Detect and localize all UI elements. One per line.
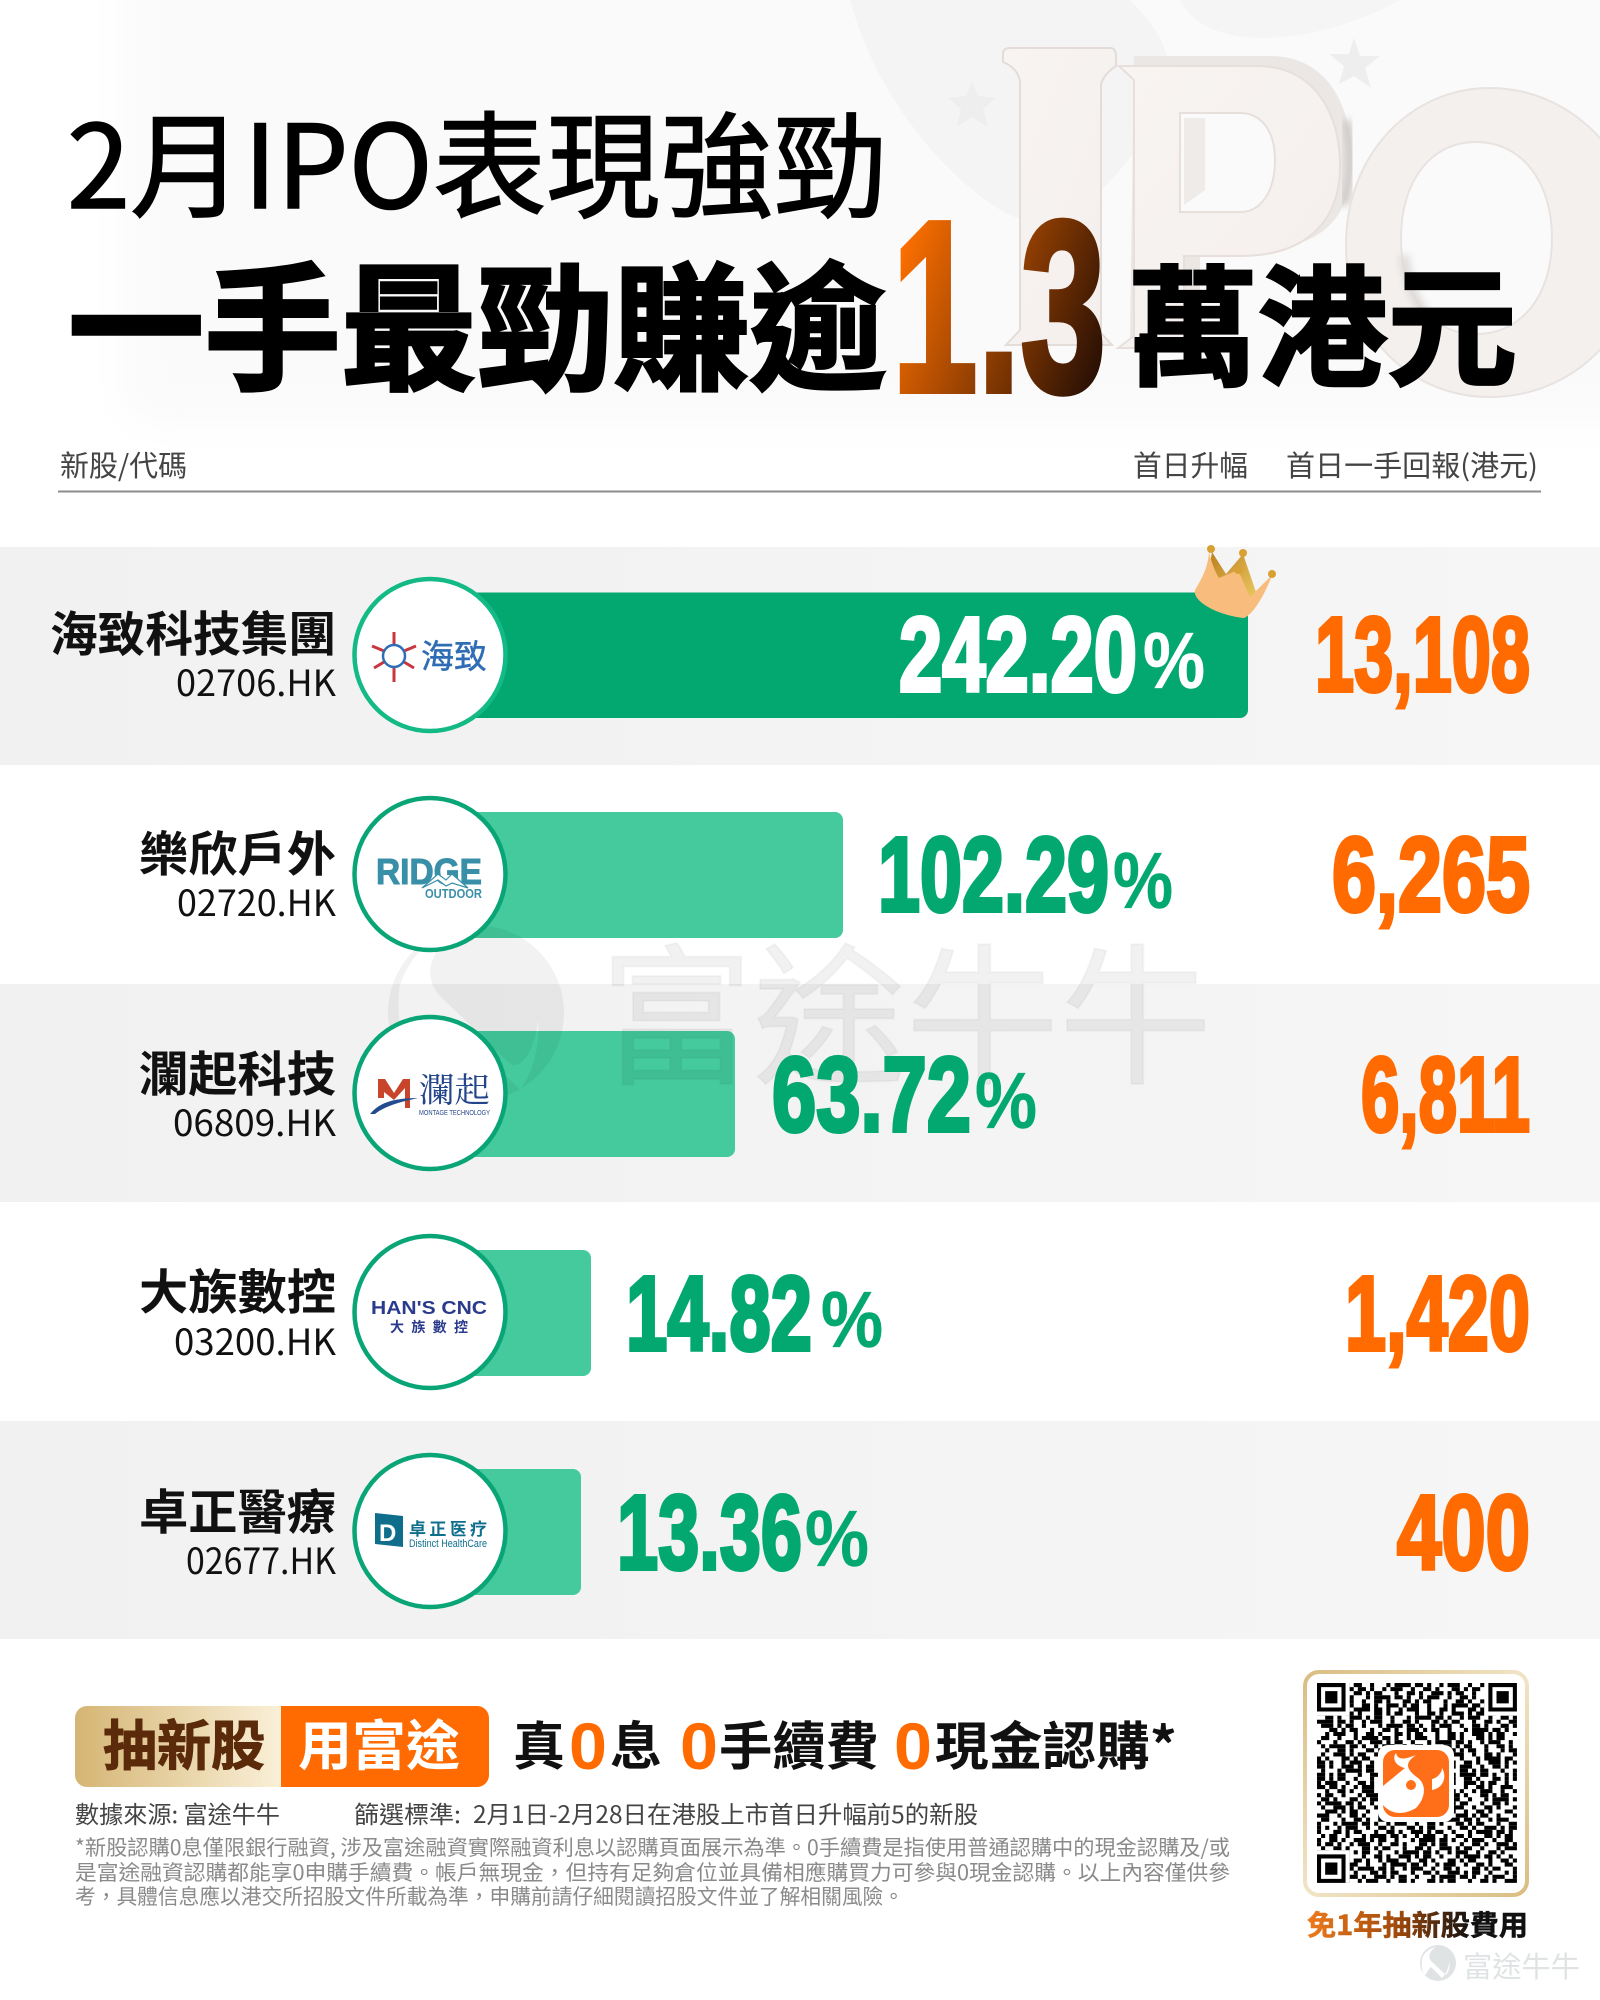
data source and screening criteria [75,1795,978,1830]
icon: gold crown [1195,545,1276,618]
header background with faint IPO artwork [125,0,1600,420]
name and code: 06809.HK [173,1095,337,1147]
value: first-day lot return: 400 [1397,1474,1530,1592]
name and code [139,1253,337,1366]
name and code: 02706.HK [176,655,337,707]
disclaimer footnote [75,1832,1230,1911]
badge: 抽新股 用富途 [75,1702,489,1787]
disclaimer footnote: 是富途融資認購都能享0申購手續費。帳戶無現金，但持有足夠倉位並具備相應購買力可參與0現金認購。以上內容僅供參 [75,1857,1230,1887]
slogan [513,1705,1177,1783]
value: first-day lot return: 6,265 [1332,816,1530,934]
name and code: 海致科技集團 [50,595,336,665]
badge: 抽新股 用富途: 抽新股 [103,1702,265,1781]
logo: 瀾起 Montage [354,1017,506,1169]
logo: HAN'S CNC [354,1236,506,1388]
value: first-day rise: % [805,1494,869,1583]
title line 2: 一手最勁賺逾 [68,219,886,419]
logo: RIDGE OUTDOOR [354,798,506,950]
row 3: 瀾起科技 [139,1017,1530,1169]
name and code [139,1035,337,1147]
value: first-day rise: % [821,1275,883,1364]
IPO 3D letter I [1003,48,1116,345]
disclaimer footnote: 考，具體信息應以港交所招股文件所載為準，申購前請仔細閱讀招股文件並了解相關風險。 [75,1881,904,1911]
value: first-day rise: 102.29 [878,816,1109,934]
value: first-day rise: 13.36 [617,1474,802,1592]
QR caption: 免1年抽新股費用 [1307,1904,1528,1944]
logo: HAN'S CNC: HAN'S CNC [371,1298,487,1318]
row 1: 海致科技集團 [50,545,1530,731]
data source and screening criteria: 篩選標準: [354,1795,461,1830]
slogan: 真 [513,1705,565,1780]
watermark bottom right: 富途牛牛 [1463,1944,1580,1986]
name and code: 大族數控 [139,1253,336,1323]
row 2: 樂欣戶外 [139,798,1530,950]
value: first-day rise: 242.20 [899,596,1137,714]
table header [58,443,1541,492]
logo: 海致: 海致 [421,630,487,678]
logo: 卓正医疗 [354,1455,506,1607]
logo: RIDGE OUTDOOR: RIDGE [376,851,482,892]
disclaimer footnote: *新股認購0息僅限銀行融資, 涉及富途融資實際融資利息以認購頁面展示為準。0手續費是指使用普通認購中的現金認購及/或 [75,1832,1230,1862]
row 5: 卓正醫療 [139,1455,1530,1607]
logo: 瀾起 Montage: 瀾起 [419,1063,490,1112]
name and code: 樂欣戶外 [139,815,336,885]
promo banner [75,1702,1177,1787]
logo: 瀾起 Montage: MONTAGE TECHNOLOGY [419,1110,490,1117]
logo: RIDGE OUTDOOR: OUTDOOR [425,886,483,901]
badge: 抽新股 用富途: 用富途 [298,1702,460,1781]
title line 2 [68,170,1517,443]
name and code: 03200.HK [174,1314,337,1366]
highlighted figure 1.3: 1.3 [892,170,1106,443]
slogan: 0 [894,1709,932,1783]
value: first-day rise: 63.72 [772,1036,971,1154]
data source and screening criteria: 2月1日-2月28日在港股上市首日升幅前5的新股 [473,1795,978,1830]
watermark: 富途牛牛: 富途牛牛 [600,896,1212,1116]
bar chart bars [430,592,1248,1595]
logo: 海致 [354,579,506,731]
data source and screening criteria: 數據來源: 富途牛牛 [75,1795,280,1830]
IPO 3D letter O [1346,88,1600,397]
title line 2: 萬港元 [1128,225,1517,413]
name and code [50,595,337,707]
logo: HAN'S CNC: 大族數控 [390,1317,468,1337]
value: first-day rise: % [975,1056,1037,1145]
value: first-day rise: % [1113,836,1173,925]
logo: 卓正医疗: 卓正医疗 [409,1515,487,1540]
title line 1: 2月IPO表現強勁 [67,76,887,242]
slogan: 0 [680,1709,718,1783]
slogan: 手續費 [719,1705,879,1780]
name and code: 02677.HK [186,1533,337,1585]
QR code [1305,1672,1527,1895]
slogan: 0 [569,1709,607,1783]
name and code [139,815,337,927]
value: first-day rise: % [1143,616,1205,705]
row background bands [0,547,1600,1639]
value: first-day rise: 14.82 [626,1255,812,1373]
row 4: 大族數控 [139,1236,1530,1388]
table header: 新股/代碼 [60,443,187,485]
slogan: 息 [610,1705,662,1780]
name and code: 卓正醫療 [139,1473,336,1543]
logo: 卓正医疗: Distinct HealthCare [409,1538,487,1550]
name and code: 瀾起科技 [139,1035,336,1105]
table header: 首日一手回報(港元) [1286,443,1538,485]
slogan: 現金認購* [935,1705,1177,1780]
IPO 3D letter P [1118,56,1352,348]
logo: 卓正医疗: D [379,1520,396,1547]
name and code: 02720.HK [177,875,337,927]
icon: Futu bull logo [1378,1745,1454,1822]
table header: 首日升幅 [1133,443,1248,485]
name and code [139,1473,337,1585]
